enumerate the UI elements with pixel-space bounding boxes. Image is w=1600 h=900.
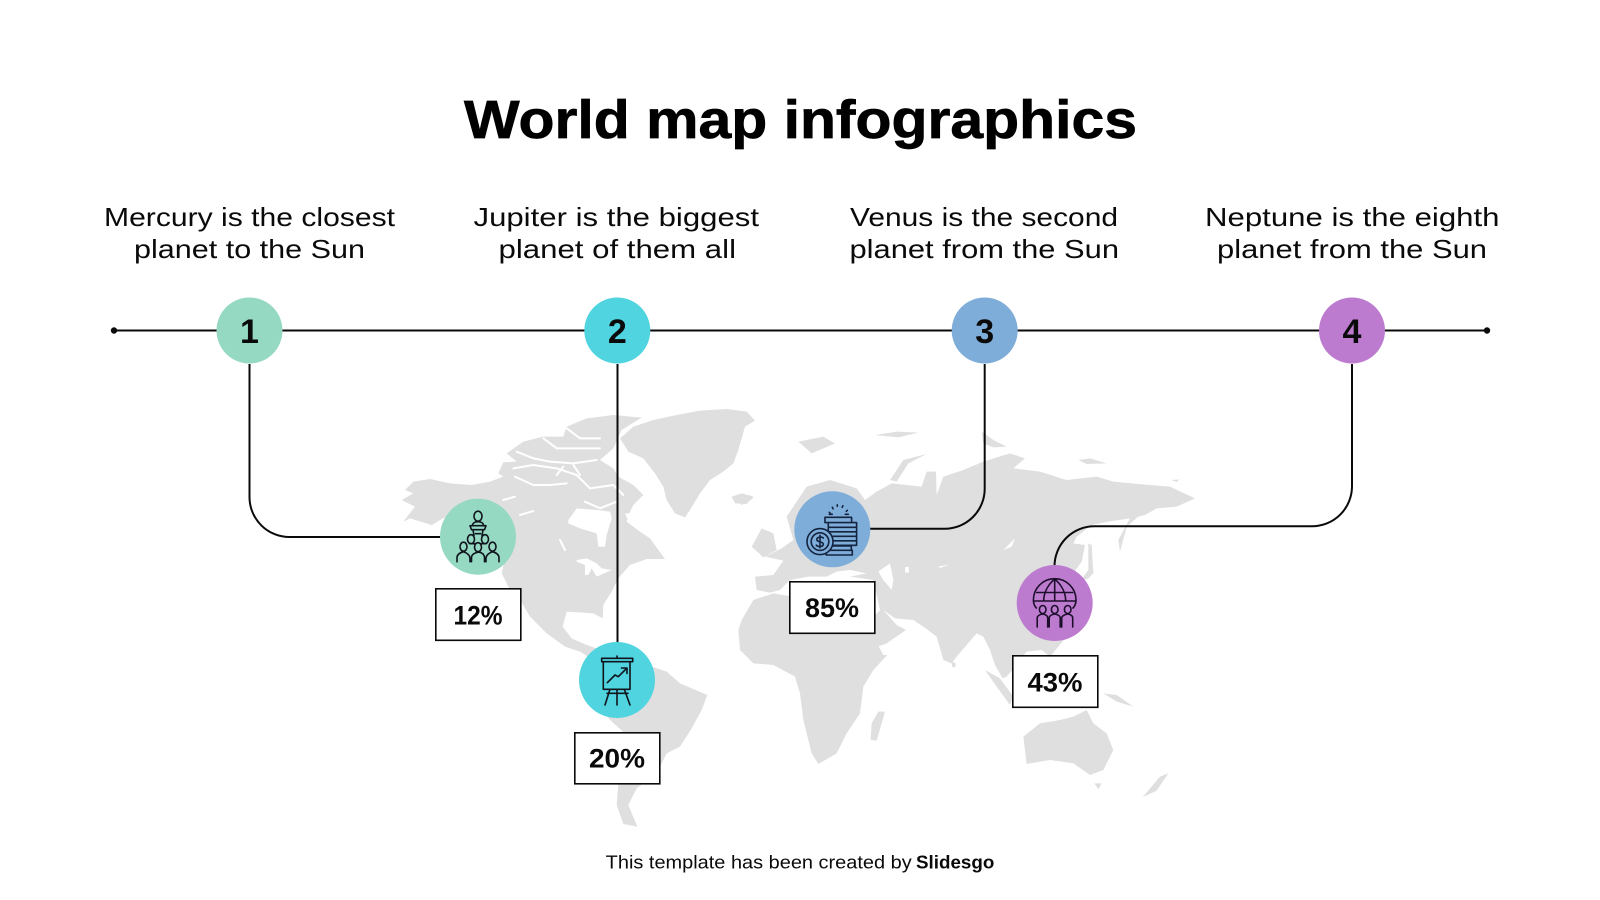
connector 1 (250, 364, 441, 537)
number badge 4 (1319, 298, 1385, 364)
step 4: description: planet from the Sun (1217, 234, 1487, 264)
step 2: description: Jupiter is the biggest (474, 202, 760, 232)
percentage box 43% (1013, 656, 1098, 707)
percentage box 20% (575, 733, 660, 784)
world map (402, 409, 1195, 827)
step 2: description: planet of them all (498, 234, 736, 264)
title: World map infographics (464, 90, 1137, 150)
number badge 2: 2 (608, 313, 627, 351)
step 3: description: Venus is the second (850, 202, 1118, 232)
step 2: description (474, 202, 760, 264)
footer credit: Slidesgo (916, 852, 994, 872)
horizontal timeline (111, 327, 1490, 334)
step 1: description: Mercury is the closest (104, 202, 396, 232)
number badge 1 (216, 298, 282, 364)
number badge 4: 4 (1343, 313, 1362, 351)
icon: globe over people (1017, 565, 1093, 641)
number badge 2 (584, 298, 650, 364)
step 4: description (1205, 202, 1500, 264)
icon: coins with dollar (794, 491, 870, 567)
step 3: description (850, 202, 1119, 264)
connector 3 (869, 364, 985, 529)
connector 4 (1054, 364, 1352, 566)
percentage box 85% (790, 582, 875, 633)
icon: audience and speaker (440, 499, 516, 575)
step 1: description (104, 202, 396, 264)
number badge 3 (952, 298, 1018, 364)
step 1: description: planet to the Sun (134, 234, 365, 264)
number badge 1: 1 (240, 313, 259, 351)
percentage box 12%: 12% (454, 600, 502, 630)
icon: flipchart with rising arrow (579, 642, 655, 718)
percentage box 43%: 43% (1028, 667, 1082, 697)
arctic channels and lakes (503, 428, 635, 577)
step 3: description: planet from the Sun (850, 234, 1119, 264)
percentage box 85%: 85% (805, 593, 859, 623)
connector 2 (616, 364, 618, 642)
footer credit: This template has been created by (606, 852, 912, 872)
number badge 3: 3 (975, 313, 994, 351)
percentage box 12% (436, 589, 521, 640)
percentage box 20%: 20% (589, 744, 645, 774)
step 4: description: Neptune is the eighth (1205, 202, 1500, 232)
